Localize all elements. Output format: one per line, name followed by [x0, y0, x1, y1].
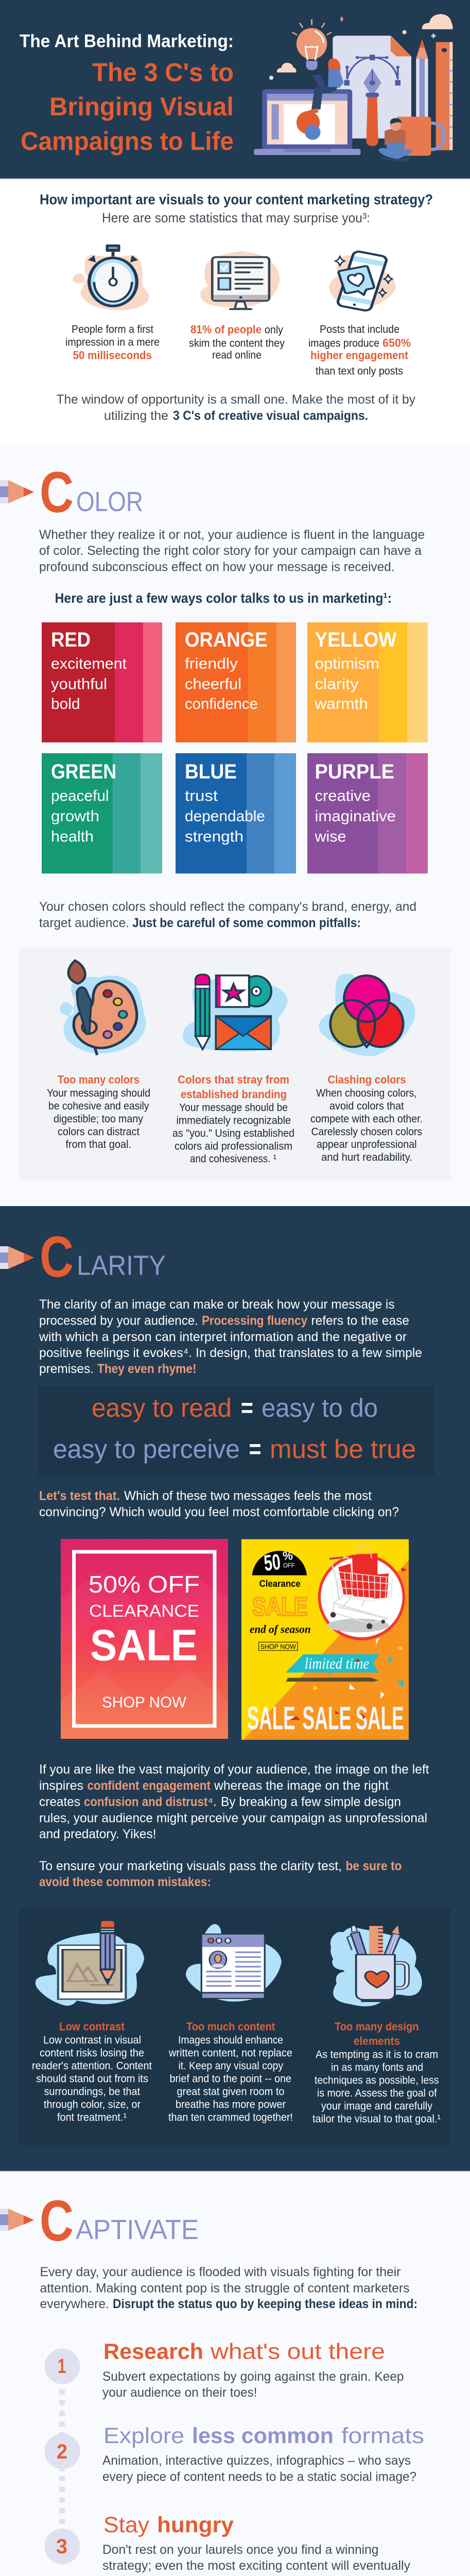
step 2: explore: Explore [103, 2424, 184, 2448]
title: Campaigns to Life [21, 127, 234, 156]
text: low contrast: content risks losing the [40, 2047, 144, 2059]
text: window of opportunity: utilizing the [104, 409, 168, 423]
text: low contrast: Low contrast [59, 2020, 125, 2033]
heading: color [40, 460, 143, 524]
subheading: ways color talks: Here are just a few ways color talks to us in marketing¹: [55, 590, 392, 606]
text: too much content: it. Keep any visual copy [178, 2060, 283, 2072]
step 3: stay hungry [44, 2513, 410, 2576]
step 3: stay hungry: strategy; even the most exciting content will eventually [102, 2558, 410, 2573]
panel: color section [0, 444, 470, 1206]
step 1: research: what's out there [210, 2339, 385, 2364]
card: green: health [51, 828, 94, 845]
icon: pencil arrow [0, 2209, 34, 2231]
image: cluttered sale poster: OFF [283, 1562, 295, 1569]
text: stray from branding: colors aid professionalism [175, 1141, 292, 1152]
text: too many design elements: As tempting as it is to cram [316, 2048, 438, 2061]
heading: captivate [40, 2189, 199, 2253]
text: window of opportunity: The window of opportunity is a small one. Make the most of it by [57, 393, 415, 407]
heading: clarity: C [40, 1225, 74, 1289]
icon: low contrast image with pencil [36, 1921, 144, 2006]
card: blue: dependable [185, 808, 265, 825]
step 1: research: Subvert expectations by going against the grain. Keep [102, 2369, 404, 2384]
title: Bringing Visual [49, 92, 234, 121]
text: captivate intro [40, 2265, 417, 2311]
text: stray from branding: immediately recognizable [176, 1115, 291, 1126]
text: too many colors [47, 1073, 150, 1150]
icon: paint palette [60, 960, 146, 1055]
text: too many design elements: techniques as possible, less [315, 2074, 439, 2087]
text: engagement stat [308, 324, 411, 377]
text: too many design elements: is more. Assess the goal of [317, 2088, 437, 2099]
icon: computer monitor with content [200, 251, 280, 309]
text: first impression stat: People form a first [72, 324, 153, 335]
callout: rhyming equations: = [249, 1434, 262, 1464]
icon: pencil arrow [0, 1246, 34, 1269]
text: window of opportunity: 3 C's of creative visual campaigns. [173, 409, 368, 423]
text: stray from branding: established branding [181, 1088, 287, 1100]
text: stray from branding: Colors that stray from [178, 1073, 289, 1086]
callout: rhyming equations: easy to read [92, 1393, 232, 1422]
text: engagement stat: images produce [308, 337, 379, 349]
card: red: youthful [51, 676, 107, 692]
heading: captivate: C [40, 2189, 74, 2253]
text: clashing colors: appear unprofessional [317, 1139, 417, 1150]
text: captivate intro: everywhere. [40, 2297, 109, 2311]
callout: rhyming equations [38, 1386, 434, 1476]
text: too many colors: colors can distract [58, 1126, 140, 1138]
text: clashing colors: Clashing colors [327, 1073, 406, 1086]
card: green [42, 753, 162, 874]
card: green: growth [51, 808, 99, 825]
icon: branding items [183, 974, 287, 1052]
text: clashing colors: avoid colors that [329, 1100, 404, 1112]
image: cluttered sale poster: SALE [356, 1701, 404, 1737]
text: low contrast: should stand out from its [36, 2073, 148, 2084]
heading: clarity: LARITY [77, 1250, 166, 1281]
title: The Art Behind Marketing: [20, 31, 234, 52]
text: let's test that: convincing? Which would you feel most comfortable clicking on? [39, 1505, 399, 1519]
title: The 3 C's to [92, 58, 234, 87]
step 2: explore: 2 [57, 2441, 67, 2463]
text: engagement stat: 650% [382, 336, 411, 349]
card: yellow [307, 622, 428, 742]
title [20, 31, 234, 156]
text: too many design elements [312, 2020, 441, 2125]
text: skim stat [189, 323, 285, 361]
card: yellow: clarity [315, 676, 358, 692]
text: processing fluency: with which a person can interpret information and the negative or [39, 1330, 407, 1344]
step 3: stay hungry: hungry [157, 2513, 234, 2537]
text: too much content: breathe has more power [176, 2099, 286, 2110]
image: cluttered sale poster: SALE [247, 1701, 295, 1737]
text: chosen colors: target audience. [39, 916, 129, 930]
text: clashing colors [310, 1073, 423, 1163]
text: left versus right explanation: and predatory. Yikes! [39, 1827, 156, 1841]
card: purple: PURPLE [315, 760, 394, 783]
step 1: research [44, 2339, 404, 2400]
step 2: explore [44, 2424, 424, 2484]
card: orange: cheerful [185, 676, 241, 692]
text: too many colors: digestible; too many [54, 1113, 143, 1125]
text: too many design elements: your image and carefully [321, 2100, 432, 2112]
step 1: research: your audience on their toes! [102, 2385, 257, 2400]
text: stray from branding: Your message should be [179, 1101, 288, 1114]
icon: hero illustration of designers with tools [254, 14, 453, 161]
heading: how important are visuals: How important are visuals to your content marketing strategy? [40, 192, 433, 207]
text: skim stat: read online [212, 349, 262, 361]
heading: clarity [40, 1225, 166, 1289]
text: too many design elements: tailor the visual to that goal.¹ [312, 2113, 441, 2125]
card: green: GREEN [51, 760, 116, 783]
text: clarity test mistakes: be sure to [346, 1859, 402, 1873]
text: stray from branding: as "you." Using established [172, 1127, 294, 1140]
panel: hero header [0, 0, 470, 179]
text: clashing colors: compete with each other. [310, 1113, 423, 1125]
step 1: research: Research [103, 2339, 203, 2364]
text: left versus right explanation: By breaking a few simple design [221, 1795, 401, 1809]
card: orange: ORANGE [185, 629, 268, 651]
card: orange [176, 622, 296, 742]
text: left versus right explanation [39, 1762, 429, 1841]
card: blue: strength [185, 828, 243, 845]
text: first impression stat: 50 milliseconds [73, 349, 152, 362]
card: orange: confidence [185, 696, 258, 713]
text: low contrast: surroundings, be that [44, 2086, 140, 2098]
text: engagement stat: Posts that include [320, 324, 399, 335]
card: green: peaceful [51, 787, 109, 805]
text: too many colors: from that goal. [66, 1139, 131, 1150]
card: purple: wise [314, 828, 346, 845]
step 2: explore: every piece of content needs to be a static social image? [102, 2470, 416, 2484]
text: left versus right explanation: whereas the image on the right [214, 1778, 389, 1793]
image: clean sale poster: SHOP NOW [102, 1694, 187, 1711]
text: clashing colors: When choosing colors, [316, 1087, 417, 1099]
step 1: research: 1 [58, 2355, 66, 2378]
panel: color pitfalls [19, 948, 450, 1180]
text: too many colors: Too many colors [58, 1073, 140, 1086]
text: low contrast: through color, size, or [44, 2099, 141, 2110]
text: first impression stat: impression in a mere [65, 336, 160, 348]
icon: mug of design tools [330, 1924, 422, 2006]
text: too many design elements: elements [354, 2035, 400, 2047]
text: too much content [168, 2020, 293, 2124]
text: too much content: than ten crammed together! [168, 2111, 293, 2124]
card: blue: trust [185, 787, 218, 805]
text: clarity test mistakes: avoid these common mistakes: [39, 1875, 211, 1889]
step 2: explore: Animation, interactive quizzes, infographics – who says [102, 2453, 411, 2468]
text: clarity test mistakes [39, 1859, 402, 1889]
card: purple [307, 753, 428, 874]
image: cluttered sale poster: % [283, 1549, 293, 1563]
text: captivate intro: Every day, your audience is flooded with visuals fighting for their [40, 2265, 401, 2279]
text: too much content: written content, not replace [168, 2047, 292, 2059]
callout: rhyming equations: must be true [270, 1434, 416, 1464]
card: yellow: YELLOW [315, 629, 397, 651]
icon: phone with heart notification [329, 251, 396, 311]
text: engagement stat: than text only posts [316, 365, 403, 377]
text: stray from branding: and cohesiveness. ¹ [190, 1153, 276, 1165]
heading: how important are visuals: Here are some statistics that may surprise you³: [102, 210, 370, 226]
card: red: excitement [51, 655, 127, 672]
panel: statistics [65, 245, 411, 377]
icon: crowded web page [186, 1924, 282, 2002]
text: too many colors: Your messaging should [47, 1087, 150, 1099]
text: processing fluency: They even rhyme! [97, 1362, 197, 1376]
image: cluttered sale poster: SALE [302, 1701, 351, 1737]
image: cluttered sale poster: end of season [250, 1622, 311, 1635]
card: purple: imaginative [315, 808, 396, 825]
text: color intro: profound subconscious effect on how your message is received. [39, 560, 394, 574]
text: color intro: Whether they realize it or not, your audience is fluent in the language [39, 528, 425, 542]
text: window of opportunity [57, 393, 415, 423]
card: red: RED [51, 629, 91, 651]
text: left versus right explanation: If you are like the vast majority of your audience, the image on the left [39, 1762, 429, 1776]
text: captivate intro: Disrupt the status quo by keeping these ideas in mind: [113, 2297, 417, 2311]
timeline connector dots [59, 2389, 65, 2524]
card: blue [176, 753, 296, 874]
text: skim stat: only [265, 324, 283, 336]
image: clean sale poster [61, 1539, 228, 1739]
text: skim stat: 81% of people [190, 323, 262, 336]
image: cluttered sale poster: limited time [305, 1655, 369, 1672]
card: yellow: warmth [314, 696, 368, 713]
text: processing fluency: positive feelings it evokes⁴. In design, that translates to a few simple [39, 1346, 422, 1360]
text: too many design elements: in as many fonts and [331, 2062, 423, 2073]
card: red: bold [51, 696, 80, 713]
card: purple: creative [315, 787, 371, 805]
card: red [42, 622, 162, 742]
text: too much content: Images should enhance [178, 2034, 283, 2046]
text: clashing colors: Carelessly chosen colors [311, 1126, 422, 1138]
text: let's test that: Let's test that. [39, 1489, 120, 1503]
heading: how important are visuals [40, 192, 433, 226]
icon: pencil arrow [0, 480, 34, 503]
text: let's test that: Which of these two messages feels the most [124, 1489, 372, 1503]
step 3: stay hungry: Don't rest on your laurels once you find a winning [102, 2543, 379, 2557]
image: cluttered sale poster [241, 1539, 409, 1740]
step 2: explore: formats [341, 2424, 424, 2448]
image: cluttered sale poster: SHOP NOW [260, 1643, 296, 1650]
image: clean sale poster: SALE [90, 1621, 198, 1670]
step 3: stay hungry: Stay [103, 2513, 150, 2537]
callout: rhyming equations: easy to do [262, 1393, 378, 1422]
image: cluttered sale poster: Clearance [259, 1578, 301, 1589]
icon: stopwatch [73, 245, 149, 310]
text: left versus right explanation: creates [39, 1795, 80, 1809]
image: cluttered sale poster: SALE [252, 1592, 308, 1621]
text: too much content: brief and to the point -- one [170, 2073, 291, 2084]
text: processing fluency: processed by your audience. [39, 1314, 198, 1328]
panel: captivate section [0, 2171, 470, 2576]
text: chosen colors [39, 900, 416, 930]
text: chosen colors: Your chosen colors should reflect the company's brand, energy, and [39, 900, 416, 914]
text: low contrast: font treatment.¹ [57, 2111, 127, 2124]
text: processing fluency: refers to the ease [311, 1314, 409, 1328]
panel: clarity section [0, 1206, 470, 2171]
text: processing fluency: The clarity of an image can make or break how your message is [39, 1297, 394, 1312]
text: processing fluency [39, 1297, 422, 1376]
text: let's test that [39, 1489, 399, 1519]
text: left versus right explanation: confusion and distrust⁴. [84, 1795, 216, 1809]
step 2: explore: less common [192, 2424, 334, 2448]
image: clean sale poster: CLEARANCE [89, 1601, 199, 1620]
text: color intro: of color. Selecting the right color story for your campaign can have a [39, 544, 422, 558]
step 3: stay hungry: 3 [56, 2535, 67, 2558]
icon: clashing circles [319, 974, 415, 1056]
image: cluttered sale poster: 50 [263, 1550, 282, 1576]
text: chosen colors: Just be careful of some common pitfalls: [132, 916, 361, 930]
heading: color: C [40, 460, 74, 524]
card: blue: BLUE [185, 760, 237, 783]
text: first impression stat [65, 324, 160, 362]
callout: rhyming equations: easy to perceive [53, 1434, 240, 1464]
heading: color: OLOR [76, 486, 143, 517]
text: left versus right explanation: inspires [39, 1778, 83, 1793]
text: clarity test mistakes: To ensure your marketing visuals pass the clarity test, [39, 1859, 342, 1873]
text: stray from branding [172, 1073, 294, 1165]
text: engagement stat: higher engagement [310, 349, 409, 362]
text: too much content: great stat given room to [177, 2086, 284, 2098]
card: orange: friendly [185, 655, 238, 672]
image: clean sale poster: 50% OFF [89, 1571, 200, 1598]
text: left versus right explanation: rules, your audience might perceive your campaign as unprofessional [39, 1811, 427, 1825]
text: clashing colors: and hurt readability. [321, 1151, 412, 1163]
panel: clarity mistakes [19, 1907, 450, 2145]
text: processing fluency: premises. [39, 1362, 94, 1376]
heading: captivate: APTIVATE [76, 2214, 199, 2245]
text: skim stat: skim the content they [189, 337, 285, 349]
text: captivate intro: attention. Making content pop is the struggle of content marketers [40, 2281, 410, 2296]
text: processing fluency: Processing fluency [202, 1314, 307, 1328]
text: low contrast: reader's attention. Content [32, 2060, 152, 2072]
text: too many design elements: Too many design [335, 2020, 419, 2033]
text: too much content: Too much content [186, 2020, 275, 2033]
text: left versus right explanation: confident engagement [88, 1778, 211, 1793]
text: low contrast: Low contrast in visual [43, 2034, 141, 2046]
text: too many colors: be cohesive and easily [48, 1100, 149, 1112]
text: color intro [39, 528, 425, 574]
callout: rhyming equations: = [241, 1393, 253, 1422]
card: yellow: optimism [315, 655, 379, 672]
text: low contrast [32, 2020, 152, 2124]
